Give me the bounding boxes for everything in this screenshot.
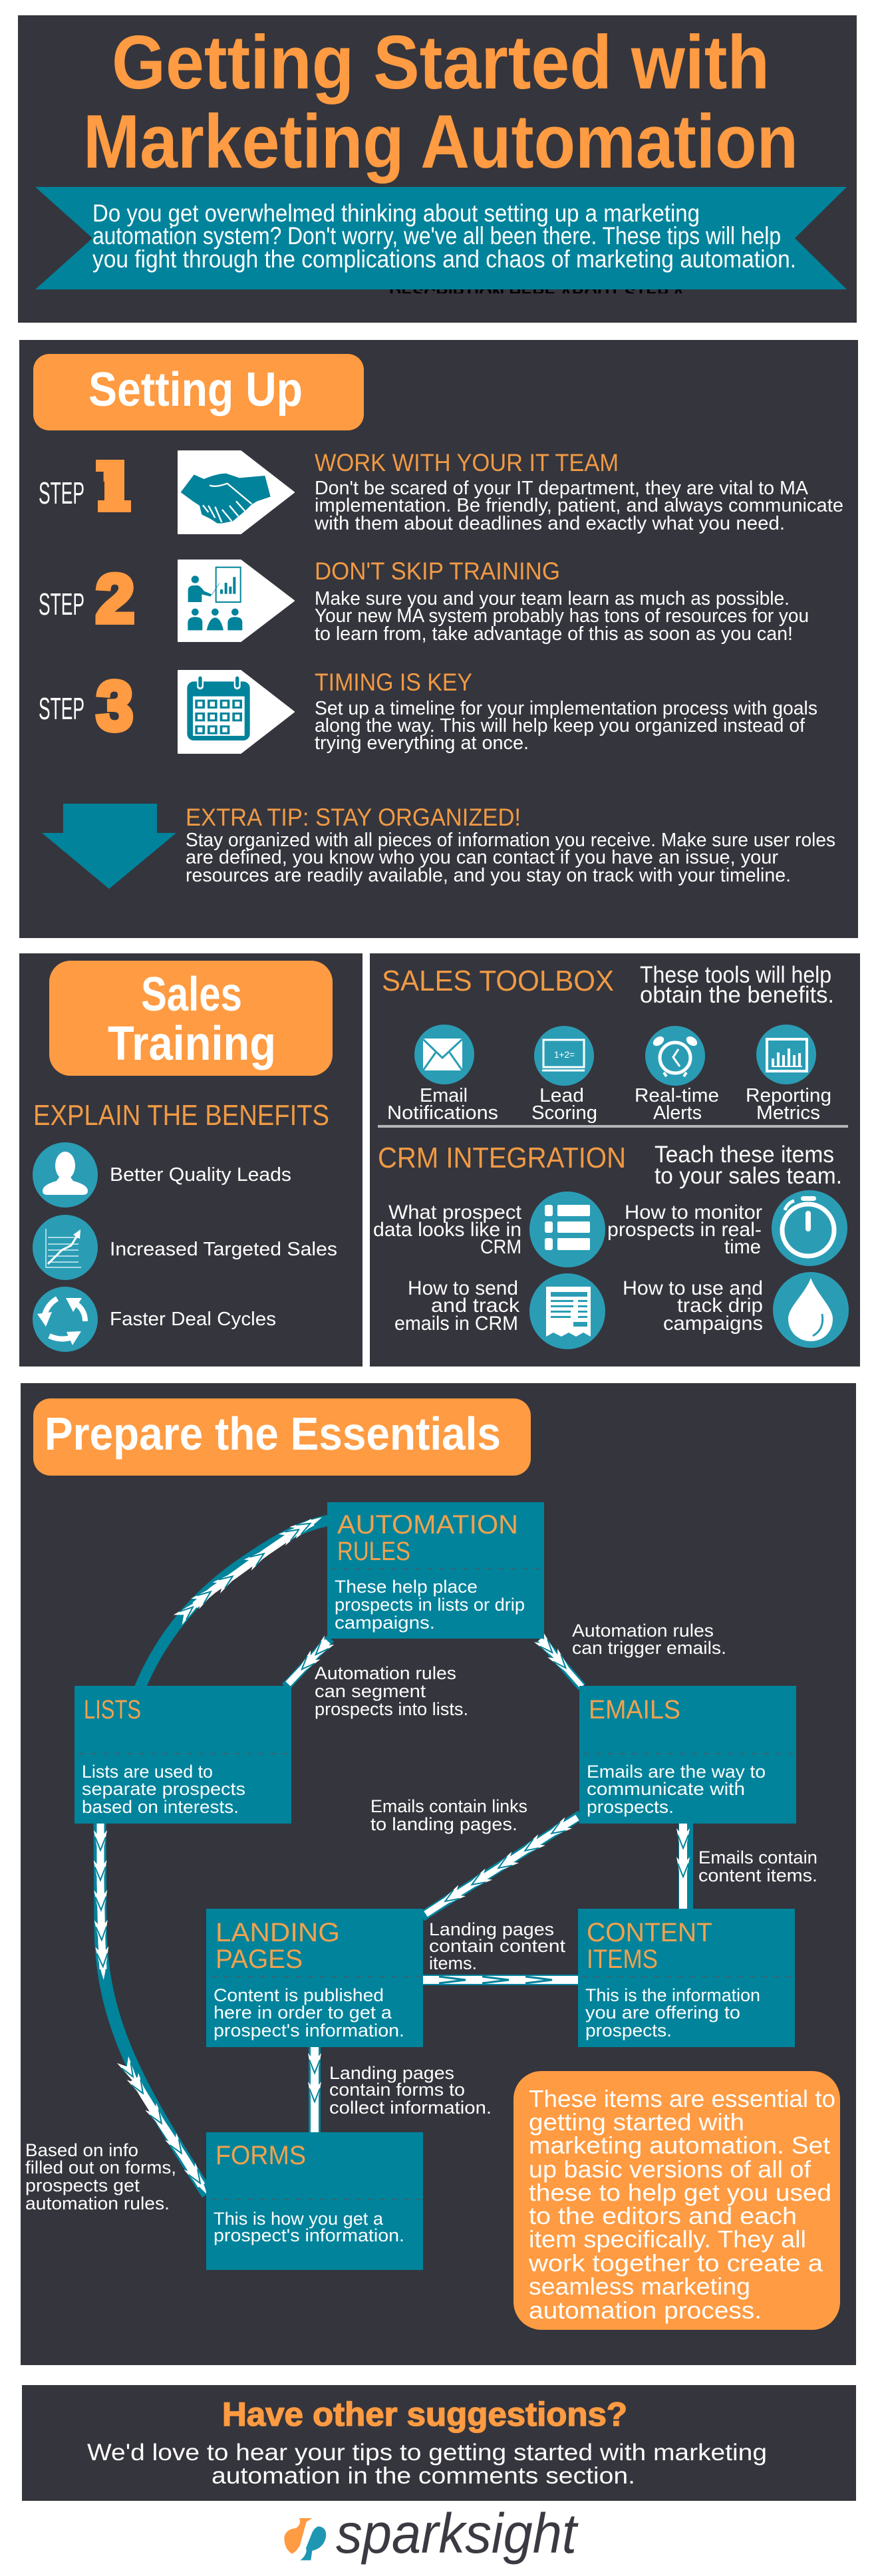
box: lists: based on interests. bbox=[82, 1797, 239, 1817]
tool: lead scoring: Lead bbox=[539, 1085, 584, 1106]
step 3 text: trying everything at once. bbox=[315, 732, 529, 754]
benefit: increased targeted sales: Increased Targeted Sales bbox=[110, 1239, 337, 1260]
box: automation rules: campaigns. bbox=[335, 1613, 435, 1633]
box: emails: Emails are the way to bbox=[587, 1762, 766, 1782]
label: automation rules trigger emails: Automation rules bbox=[572, 1621, 714, 1641]
cta text: automation in the comments section. bbox=[212, 2463, 635, 2489]
toolbox intro text bbox=[640, 962, 834, 1008]
label: landing pages contain content items: Landing pages bbox=[429, 1919, 554, 1939]
callout: essentials summary: These items are essential to bbox=[529, 2085, 835, 2112]
panel: prepare the essentials bbox=[21, 1383, 856, 2365]
connector: landing pages to content items bbox=[423, 1975, 578, 1985]
icon: training bbox=[178, 560, 294, 641]
tool: email notifications bbox=[387, 1025, 498, 1124]
label: emails contain links: Emails contain links bbox=[370, 1796, 527, 1816]
tool: reporting metrics: Metrics bbox=[756, 1102, 820, 1124]
label: forms to automation rules: filled out on forms, bbox=[25, 2158, 176, 2177]
label: emails contain content items: Emails contain bbox=[698, 1848, 817, 1867]
intro ribbon: automation system? Don't worry, we've all been there. These tips will help bbox=[92, 222, 781, 249]
CRM intro text: to your sales team. bbox=[655, 1163, 842, 1189]
extra tip text: are defined, you know who you can contact if you have an issue, your bbox=[186, 847, 778, 868]
label: emails contain links bbox=[370, 1796, 527, 1834]
label: automation rules trigger emails: can trigger emails. bbox=[572, 1638, 726, 1658]
step 3: STEP bbox=[39, 691, 84, 726]
label: forms to automation rules: Based on info bbox=[25, 2140, 138, 2160]
box: landing pages: prospect's information. bbox=[214, 2020, 404, 2040]
box: lists bbox=[74, 1686, 291, 1824]
extra tip text: resources are readily available, and you stay on track with your timeline. bbox=[186, 865, 791, 886]
box: forms: This is how you get a bbox=[214, 2209, 384, 2229]
step 2 text: to learn from, take advantage of this as soon as you can! bbox=[315, 623, 793, 645]
callout: essentials summary: automation process. bbox=[529, 2297, 762, 2324]
step 3 text: TIMING IS KEY bbox=[315, 669, 472, 696]
cta text bbox=[87, 2440, 767, 2489]
step 2: 2 bbox=[96, 561, 134, 637]
tool: real-time alerts: Alerts bbox=[653, 1102, 702, 1124]
label: landing pages contain forms: contain forms to bbox=[329, 2080, 465, 2100]
CRM item: drip campaigns bbox=[623, 1272, 849, 1348]
callout: essentials summary: these to help get you used bbox=[529, 2179, 831, 2206]
connector: emails to landing pages bbox=[422, 1815, 581, 1917]
title bbox=[83, 21, 798, 184]
extra tip text bbox=[186, 804, 835, 886]
callout: essentials summary: up basic versions of all of bbox=[529, 2156, 811, 2183]
callout: essentials summary: to the editors and each bbox=[529, 2202, 797, 2229]
toolbox intro text: These tools will help bbox=[640, 962, 831, 988]
callout: essentials summary: work together to create a bbox=[528, 2249, 823, 2277]
box: content items: ITEMS bbox=[587, 1945, 658, 1974]
heading: sales training: Sales bbox=[141, 968, 242, 1021]
intro ribbon bbox=[35, 187, 847, 289]
label: automation rules segment prospects: prospects into lists. bbox=[315, 1699, 468, 1719]
panel: sales training bbox=[19, 953, 363, 1367]
label: automation rules segment prospects: can segment bbox=[315, 1681, 426, 1701]
tool: email notifications: Notifications bbox=[387, 1102, 498, 1124]
panel: sales toolbox and CRM integration bbox=[370, 953, 860, 1367]
panel: header bbox=[18, 15, 857, 323]
connector: automation rules to lists bbox=[285, 1639, 331, 1687]
heading: CRM integration: CRM INTEGRATION bbox=[378, 1142, 626, 1174]
box: lists: Lists are used to bbox=[82, 1762, 213, 1782]
CRM item: drip campaigns: track drip bbox=[677, 1295, 763, 1317]
connector: lists to forms bbox=[100, 1824, 208, 2194]
tool: email notifications: Email bbox=[420, 1085, 468, 1106]
step 3: 3 bbox=[96, 668, 133, 745]
connector: landing pages to forms bbox=[309, 2047, 321, 2132]
title: Getting Started with bbox=[112, 21, 770, 105]
step 2 bbox=[39, 558, 809, 645]
step 3 bbox=[39, 668, 817, 754]
box: automation rules: AUTOMATION bbox=[337, 1510, 518, 1539]
step 1 text: WORK WITH YOUR IT TEAM bbox=[315, 449, 619, 476]
step 1: 1 bbox=[102, 450, 127, 524]
label: emails contain links: to landing pages. bbox=[370, 1814, 517, 1834]
box: automation rules: prospects in lists or drip bbox=[335, 1595, 525, 1615]
step 1 text: Don't be scared of your IT department, they are vital to MA bbox=[315, 478, 809, 499]
label: landing pages contain forms bbox=[329, 2063, 492, 2118]
CRM item: send and track emails: and track bbox=[431, 1295, 520, 1317]
CRM item: prospect data: What prospect bbox=[388, 1202, 522, 1223]
label: forms to automation rules: automation rules. bbox=[25, 2193, 170, 2213]
CRM item: send and track emails: How to send bbox=[408, 1277, 518, 1299]
heading: prepare the essentials bbox=[33, 1398, 531, 1476]
panel: setting up bbox=[19, 340, 858, 938]
box: landing pages: Content is published bbox=[214, 1985, 384, 2005]
heading: prepare the essentials: Prepare the Essentials bbox=[45, 1408, 501, 1460]
panel: call to action bbox=[22, 2385, 856, 2501]
box: content items: This is the information bbox=[585, 1985, 760, 2005]
label: landing pages contain forms: collect information. bbox=[329, 2098, 492, 2118]
benefit: faster deal cycles: Faster Deal Cycles bbox=[110, 1309, 276, 1330]
box: forms: FORMS bbox=[216, 2141, 306, 2170]
label: forms to automation rules: prospects get bbox=[25, 2175, 140, 2195]
cta text: We'd love to hear your tips to getting started with marketing bbox=[87, 2440, 767, 2466]
label: landing pages contain content items: contain content bbox=[429, 1936, 566, 1956]
label: landing pages contain forms: Landing pages bbox=[329, 2063, 454, 2083]
step 2 text bbox=[315, 558, 809, 645]
step 3 text: along the way. This will help keep you organized instead of bbox=[315, 715, 805, 736]
box: emails bbox=[579, 1686, 796, 1824]
step 1 text bbox=[314, 449, 843, 534]
box: landing pages bbox=[206, 1909, 423, 2047]
tool: lead scoring: 1+2= bbox=[554, 1049, 575, 1060]
label: emails contain content items bbox=[698, 1848, 817, 1885]
box: content items: CONTENT bbox=[587, 1918, 712, 1947]
step 1: STEP bbox=[39, 476, 84, 510]
benefit: increased targeted sales bbox=[33, 1215, 337, 1280]
step 1 bbox=[39, 449, 843, 534]
label: landing pages contain content items bbox=[429, 1919, 566, 1973]
step 1 text: implementation. Be friendly, patient, and always communicate bbox=[315, 495, 843, 516]
cta heading: Have other suggestions? bbox=[222, 2396, 627, 2433]
CRM item: prospect data bbox=[373, 1192, 605, 1267]
tool: reporting metrics: Reporting bbox=[746, 1085, 831, 1106]
label: automation rules segment prospects: Automation rules bbox=[315, 1663, 456, 1683]
label: automation rules segment prospects bbox=[315, 1663, 468, 1719]
icon: calendar bbox=[178, 671, 294, 753]
callout: essentials summary: getting started with bbox=[529, 2108, 744, 2136]
CRM item: monitor prospects: How to monitor bbox=[625, 1202, 762, 1223]
step 3 text bbox=[315, 669, 817, 754]
box: automation rules: These help place bbox=[335, 1577, 478, 1597]
CRM item: prospect data: CRM bbox=[480, 1236, 521, 1258]
CRM item: monitor prospects: prospects in real- bbox=[607, 1219, 762, 1241]
CRM intro text: Teach these items bbox=[655, 1142, 834, 1168]
label: forms to automation rules bbox=[25, 2140, 176, 2213]
toolbox intro text: obtain the benefits. bbox=[640, 982, 834, 1008]
box: automation rules bbox=[327, 1502, 544, 1639]
connector: automation rules to emails bbox=[540, 1639, 582, 1687]
icon: handshake bbox=[178, 451, 294, 534]
CRM item: monitor prospects bbox=[607, 1190, 847, 1266]
connector: lists to automation rules bbox=[140, 1520, 330, 1689]
benefit: faster deal cycles bbox=[33, 1287, 276, 1352]
label: automation rules trigger emails bbox=[572, 1621, 726, 1658]
benefit: better quality leads: Better Quality Leads bbox=[110, 1164, 291, 1186]
step 2 text: Make sure you and your team learn as much as possible. bbox=[315, 588, 790, 609]
box: landing pages: LANDING bbox=[216, 1918, 340, 1947]
CRM item: send and track emails: emails in CRM bbox=[394, 1313, 518, 1335]
heading: sales toolbox: SALES TOOLBOX bbox=[382, 965, 614, 997]
heading: setting up bbox=[33, 354, 364, 430]
intro ribbon: Do you get overwhelmed thinking about setting up a marketing bbox=[92, 200, 700, 227]
step 1 text: with them about deadlines and exactly what you need. bbox=[314, 513, 785, 534]
arrow: extra tip bbox=[42, 804, 176, 889]
CRM item: drip campaigns: campaigns bbox=[663, 1313, 763, 1335]
box: forms bbox=[206, 2132, 423, 2270]
step 2 text: Your new MA system probably has tons of resources for you bbox=[315, 605, 809, 627]
box: content items bbox=[578, 1909, 795, 2047]
callout: essentials summary: marketing automation. Set bbox=[529, 2132, 830, 2159]
tool: reporting metrics bbox=[746, 1025, 831, 1124]
heading: sales training bbox=[49, 961, 333, 1076]
heading: explain the benefits: EXPLAIN THE BENEFITS bbox=[33, 1099, 329, 1132]
clipped placeholder text: DESCRIPTION HERE ABOUT STEP A bbox=[389, 285, 684, 301]
box: lists: LISTS bbox=[84, 1695, 141, 1724]
box: emails: EMAILS bbox=[589, 1695, 680, 1724]
box: landing pages: PAGES bbox=[216, 1945, 303, 1974]
box: forms: prospect's information. bbox=[214, 2225, 404, 2245]
benefit: better quality leads bbox=[33, 1142, 291, 1208]
box: content items: prospects. bbox=[585, 2020, 672, 2040]
callout: essentials summary bbox=[513, 2071, 840, 2330]
intro ribbon: you fight through the complications and chaos of marketing automation. bbox=[92, 245, 796, 273]
heading: sales training: Training bbox=[108, 1017, 276, 1070]
extra tip text: Stay organized with all pieces of information you receive. Make sure user roles bbox=[186, 830, 835, 851]
CRM item: prospect data: data looks like in bbox=[373, 1219, 521, 1241]
heading: setting up: Setting Up bbox=[88, 363, 303, 416]
extra tip text: EXTRA TIP: STAY ORGANIZED! bbox=[186, 804, 521, 831]
tool: real-time alerts: Real-time bbox=[635, 1085, 719, 1106]
label: landing pages contain content items: items. bbox=[429, 1953, 477, 1973]
tool: lead scoring bbox=[531, 1026, 597, 1124]
CRM intro text bbox=[655, 1142, 842, 1189]
CRM item: monitor prospects: time bbox=[724, 1236, 761, 1258]
step 2: STEP bbox=[39, 587, 84, 621]
label: emails contain content items: content items. bbox=[698, 1865, 817, 1885]
step 3 text: Set up a timeline for your implementation process with goals bbox=[315, 698, 817, 719]
logo: sparksight: sparksight bbox=[336, 2502, 579, 2565]
box: lists: separate prospects bbox=[82, 1779, 245, 1799]
tool: real-time alerts bbox=[635, 1026, 719, 1124]
box: automation rules: RULES bbox=[337, 1537, 410, 1566]
CRM item: send and track emails bbox=[394, 1273, 605, 1349]
box: emails: communicate with bbox=[587, 1779, 745, 1799]
connector: emails to content items bbox=[683, 1824, 686, 1909]
CRM item: drip campaigns: How to use and bbox=[623, 1277, 763, 1299]
title: Marketing Automation bbox=[83, 100, 798, 184]
box: emails: prospects. bbox=[587, 1797, 674, 1817]
callout: essentials summary: seamless marketing bbox=[529, 2273, 750, 2300]
box: content items: you are offering to bbox=[585, 2003, 740, 2022]
tool: lead scoring: Scoring bbox=[531, 1102, 597, 1124]
callout: essentials summary: item specifically. They all bbox=[529, 2225, 806, 2253]
step 2 text: DON'T SKIP TRAINING bbox=[315, 558, 560, 585]
box: landing pages: here in order to get a bbox=[214, 2003, 392, 2022]
